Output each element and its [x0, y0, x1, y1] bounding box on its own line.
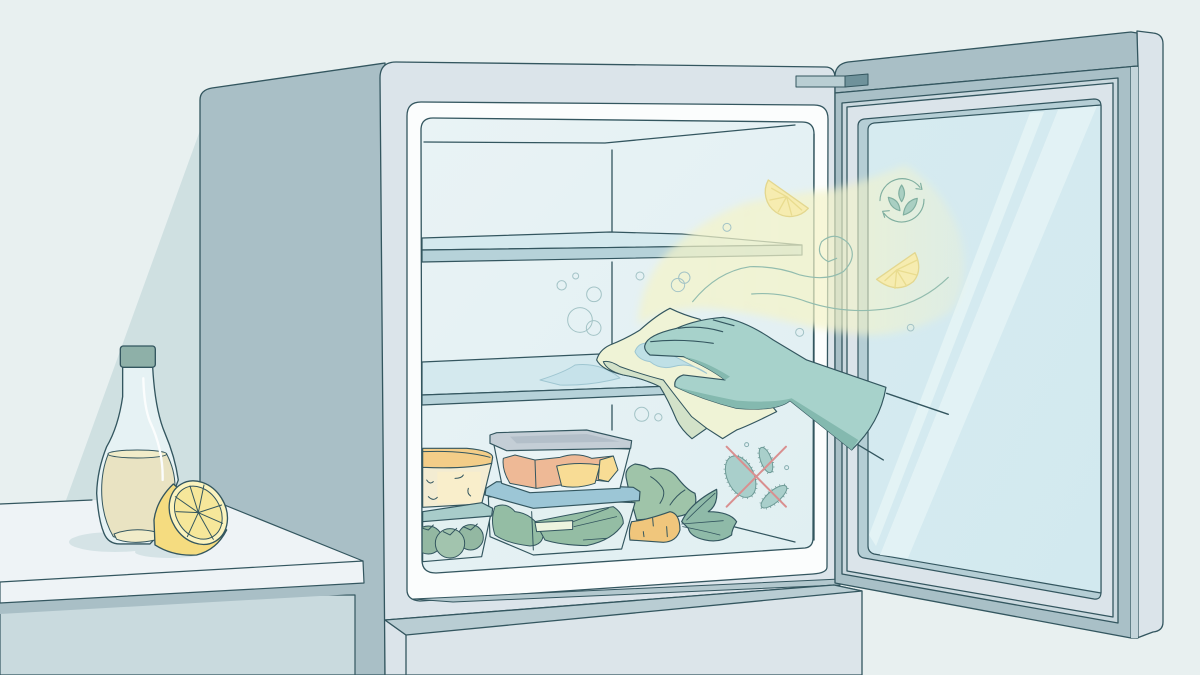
liquid base: [114, 530, 156, 542]
arm lines: [858, 393, 948, 460]
yellow-lid container: [423, 448, 493, 507]
panel: fridge body: [200, 62, 862, 675]
fridge side: [200, 63, 385, 675]
icon: recycling leaves: [880, 179, 924, 222]
counter top: [0, 500, 363, 582]
wall shadow: [65, 125, 202, 503]
door gasket: [842, 78, 1118, 623]
icon: vinegar bottle: [97, 346, 178, 544]
icon: lemon wedge lower: [877, 253, 919, 288]
germ spikes: [719, 446, 790, 512]
bottle highlight: [143, 378, 163, 480]
door hinge: [796, 74, 868, 87]
door top face: [835, 32, 1138, 93]
icon: lemon wedge upper: [765, 180, 808, 217]
cleaning cloth: [597, 308, 777, 439]
peach container: [490, 430, 632, 493]
air swirl lines: [693, 236, 948, 311]
carrot marks: [643, 518, 667, 537]
white interior rim: [407, 102, 828, 601]
drawer: [385, 585, 862, 675]
carrot greens: [682, 489, 737, 541]
glass reflection narrow: [869, 112, 1044, 546]
lower frame band: [413, 579, 840, 602]
blue-lid container: [485, 482, 640, 555]
icon: halved lemon: [154, 470, 239, 555]
carrot: [629, 512, 680, 542]
icon: crossed-out germs: [719, 443, 790, 512]
germ bodies: [719, 446, 790, 512]
glass reflection wide: [880, 106, 1097, 558]
germ specks: [745, 443, 789, 470]
panel: open door: [796, 31, 1163, 638]
soap bubbles: [557, 223, 914, 421]
panel: counter: [0, 500, 364, 675]
panel: food containers: [414, 430, 737, 562]
wet patch: [635, 343, 707, 373]
water on shelf: [540, 365, 620, 385]
panel: lower shelf: [422, 354, 700, 405]
tomato container: [414, 503, 493, 562]
thumb crease shading: [683, 357, 730, 380]
counter edge: [0, 561, 364, 603]
fridge interior: [421, 118, 814, 573]
cloth fold: [603, 361, 707, 439]
liquid surface: [108, 450, 167, 458]
cabinet shadow band: [0, 583, 355, 614]
door outer band: [835, 66, 1138, 638]
door side edge: [1137, 31, 1163, 638]
drawer top lip: [385, 585, 862, 635]
door panel: [847, 83, 1113, 617]
panel: fridge back wall lines: [424, 125, 814, 542]
cabbage veins: [651, 477, 685, 505]
greens veins: [682, 493, 723, 535]
door glass: [868, 105, 1101, 593]
red cross: [727, 447, 786, 507]
bottle cap: [120, 346, 155, 367]
rubber glove: [645, 317, 886, 450]
panel: bubbles, freshness symbols, cloth and glove: [557, 179, 948, 460]
fridge front frame: [380, 62, 840, 675]
fresh air mist: [638, 165, 964, 335]
cabinet front: [0, 595, 355, 675]
counter contact shadows: [69, 532, 161, 552]
inner lip: [858, 99, 1101, 599]
glove finger lines: [651, 320, 734, 343]
liquid: [102, 450, 175, 539]
cabbage: [626, 464, 696, 520]
glove shading: [675, 387, 858, 450]
panel: upper shelf: [422, 232, 802, 262]
